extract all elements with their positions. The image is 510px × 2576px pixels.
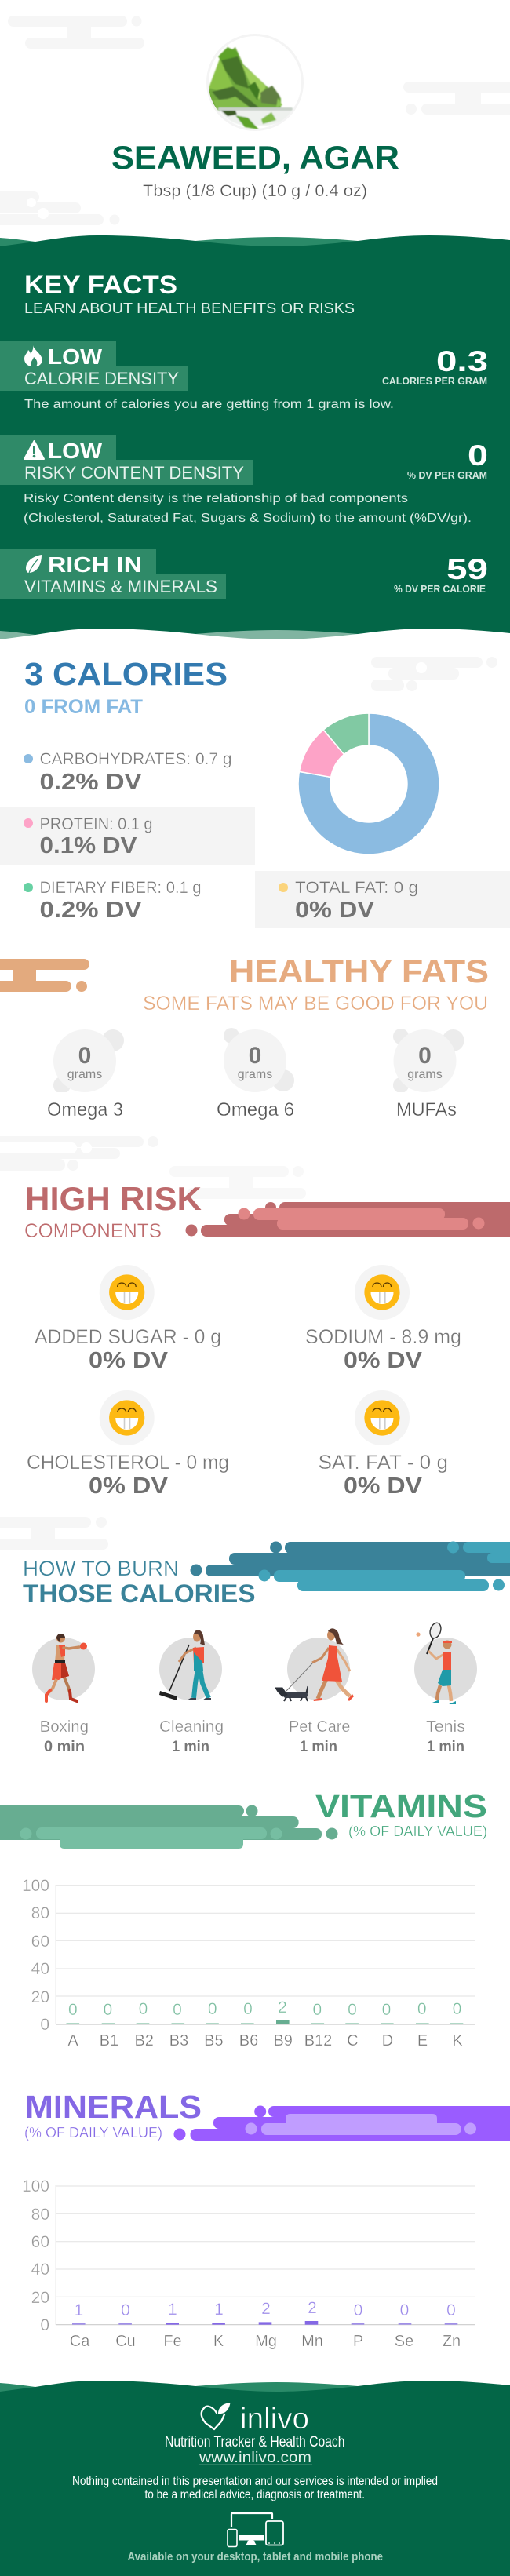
bar chart: vitamins: 40 [31,1960,49,1978]
icon: boxer [46,1634,87,1701]
risk: cholesterol: CHOLESTEROL - 0 mg [27,1452,229,1474]
decorative band: healthy fats [0,959,89,992]
heading: those calories: THOSE CALORIES [23,1579,256,1608]
fact: calorie density [0,341,488,391]
bar chart: minerals: 40 [31,2261,49,2279]
bar chart: minerals: P [353,2333,363,2350]
label: risky content density: RISKY CONTENT DENSITY [24,463,244,483]
panel: vitamins [0,1788,487,2050]
bar chart: vitamins [22,1877,475,2050]
heading: healthy fats: HEALTHY FATS [229,953,489,989]
legend: protein: 0.1% DV [39,833,137,858]
panel: total fat background [255,871,510,928]
legend: dietary fiber: DIETARY FIBER: 0.1 g [39,879,201,897]
bar chart: minerals: 1 [214,2301,224,2319]
bar chart: vitamins: B2 [134,2032,154,2050]
bar chart: vitamins: 0 [382,2001,391,2019]
activity: cleaning [159,1630,224,1755]
stat: mufas: grams [407,1068,443,1081]
icon: devices [228,2513,283,2547]
stat: omega 3: grams [67,1068,102,1081]
description: risky content density: Risky Content density is the relationship of bad components [24,492,408,505]
bar chart: vitamins: 0 [139,2000,148,2018]
tagline: Nutrition Tracker & Health Coach [165,2434,345,2450]
bar chart: minerals: 0 [40,2316,49,2334]
availability note: Available on your desktop, tablet and mobile phone [127,2550,383,2563]
stat: omega 6 [217,1028,294,1120]
description: risky content density [24,492,472,525]
bar chart: vitamins: B12 [304,2032,332,2050]
unit: calories per gram: CALORIES PER GRAM [382,375,487,387]
bar chart: vitamins: 0 [312,2001,322,2019]
activity: pet care: Pet Care [289,1718,350,1736]
value: calories per gram: 0.3 [436,345,488,377]
heading: key facts: KEY FACTS [24,271,177,299]
bar chart: vitamins: 0 [417,2000,427,2018]
activity: pet care: 1 min [300,1739,337,1755]
stat: omega 6: Omega 6 [217,1099,294,1120]
value: dv per calorie: 59 [446,553,488,585]
heading: minerals: MINERALS [25,2089,202,2125]
value: dv per gram: 0 [468,439,488,472]
legend: protein: PROTEIN: 0.1 g [39,815,152,833]
bar chart: vitamins: 0 [68,2001,78,2019]
risk: sodium [305,1265,461,1373]
bar chart: vitamins: 20 [31,1988,49,2006]
heading: calories: 3 CALORIES [24,656,228,692]
unit: dv per gram: % DV PER GRAM [407,469,487,481]
bar chart: minerals: 1 [75,2301,83,2319]
decorative band: minerals [174,2106,510,2141]
stat: mufas: 0 [418,1043,432,1069]
rating: low: LOW [48,439,103,463]
legend: total fat: 0% DV [295,898,375,923]
decorative band: high risk [185,1202,510,1237]
bar chart: minerals: Ca [70,2333,90,2350]
legend: dietary fiber [24,879,201,923]
activity: tennis: Tenis [426,1718,465,1736]
legend: dietary fiber: 0.2% DV [39,898,142,923]
bar chart: vitamins: K [452,2032,463,2050]
subheading: healthy fats: SOME FATS MAY BE GOOD FOR YOU [143,993,488,1015]
bar chart: vitamins: C [347,2032,359,2050]
icon: leaf [26,555,42,573]
rating: rich in: RICH IN [48,552,142,577]
stat: omega 3: Omega 3 [47,1099,123,1120]
icon: woman walking dog [275,1628,354,1701]
disclaimer: Nothing contained in this presentation and our services is intended or implied [72,2475,438,2488]
logo: inlivo [202,2403,309,2436]
bar chart: minerals: 0 [446,2301,456,2319]
disclaimer: to be a medical advice, diagnosis or treatment. [144,2488,365,2501]
bar chart: vitamins: B1 [100,2032,118,2050]
stat: mufas: MUFAs [396,1099,457,1120]
decorative cloud: top right [403,82,510,115]
legend: carbohydrates [24,750,232,795]
fact: risky content density [0,435,488,485]
panel: calories [0,656,510,928]
label: calorie density: CALORIE DENSITY [24,369,179,388]
bar chart: minerals: 1 [168,2301,177,2319]
bar chart: minerals: Se [395,2333,413,2350]
decorative cloud: above high risk right [169,1166,306,1199]
food photo: seaweed in a glass bowl [207,35,303,130]
bar chart: minerals: K [213,2333,224,2350]
stat: omega 6: 0 [249,1043,261,1069]
risk: saturated fat: SAT. FAT - 0 g [319,1452,448,1474]
bar chart: vitamins: B3 [169,2032,188,2050]
bar chart: minerals: Mn [301,2333,323,2350]
bar chart: vitamins: B9 [273,2032,293,2050]
bar chart: minerals: Mg [255,2333,277,2350]
disclaimer [72,2475,438,2501]
activity: tennis: 1 min [427,1739,464,1755]
bar chart: vitamins: 100 [22,1877,49,1895]
bar chart: vitamins: 0 [104,2001,112,2019]
risk: saturated fat: 0% DV [344,1474,423,1499]
icon: tennis player [416,1621,456,1704]
bar chart: vitamins: 0 [243,2000,253,2018]
subheading: from fat: 0 FROM FAT [24,696,143,718]
bar chart: vitamins: E [417,2032,428,2050]
subheading: percent of daily value: (% OF DAILY VALUE) [24,2125,162,2141]
bar chart: vitamins: D [382,2032,393,2050]
bar chart: vitamins: 80 [31,1904,49,1922]
activity: boxing: 0 min [44,1739,85,1755]
unit: dv per calorie: % DV PER CALORIE [394,583,486,595]
description: calorie density: The amount of calories you are getting from 1 gram is low. [24,398,394,411]
bar chart: minerals: 2 [308,2299,317,2317]
stat: omega 3: 0 [78,1043,91,1069]
bar chart: vitamins: 0 [173,2001,182,2019]
activity: cleaning: 1 min [172,1739,209,1755]
subheading: components: COMPONENTS [24,1220,162,1242]
risk: added sugar: 0% DV [89,1348,169,1373]
panel: how to burn those calories [23,1541,510,1755]
activity: tennis [414,1621,477,1755]
description: risky content density: (Cholesterol, Saturated Fat, Sugars & Sodium) to the amount (%DV/gr). [24,512,472,525]
panel: healthy fats [0,953,489,1120]
stat: omega 6: grams [238,1068,272,1081]
fact: rich in vitamins and minerals [0,549,488,599]
subheading: key facts: LEARN ABOUT HEALTH BENEFITS OR RISKS [24,301,355,316]
bar chart: vitamins: A [67,2032,78,2050]
bar chart: minerals: Cu [115,2333,136,2350]
donut chart [298,713,439,854]
website: www.inlivo.com [199,2450,311,2466]
risk: saturated fat [319,1390,448,1499]
legend: protein [24,815,152,858]
risk: sodium: 0% DV [344,1348,423,1373]
subheading: percent of daily value: (% OF DAILY VALUE) [348,1824,487,1839]
decorative band: vitamins [0,1805,337,1849]
icon: warning triangle [24,441,44,459]
risk: sodium: SODIUM - 8.9 mg [305,1326,461,1348]
heading: how to burn: HOW TO BURN [23,1557,179,1580]
activity: pet care [275,1628,354,1755]
risk: added sugar [35,1265,221,1373]
bar chart: minerals: 80 [31,2206,49,2224]
bar chart: minerals: 0 [400,2301,409,2319]
decorative cloud: calories [371,657,497,691]
activity: cleaning: Cleaning [159,1718,224,1736]
bar chart: minerals: 0 [121,2301,130,2319]
bar chart: minerals [22,2177,475,2350]
bar chart: vitamins: 0 [453,2000,461,2018]
decorative band: burn [190,1541,510,1591]
bar chart: vitamins: B6 [239,2032,258,2050]
bar chart: minerals: 60 [31,2233,49,2251]
bar chart: vitamins: 0 [40,2016,49,2034]
panel: high risk [24,1180,510,1499]
footer [0,2381,510,2576]
heading: vitamins: VITAMINS [315,1788,487,1824]
risk: added sugar: ADDED SUGAR - 0 g [35,1326,221,1348]
risk: cholesterol [27,1390,229,1499]
decorative cloud: lower left [0,191,119,225]
legend: total fat: TOTAL FAT: 0 g [295,879,418,897]
icon: person sweeping [159,1630,211,1700]
legend: carbohydrates: CARBOHYDRATES: 0.7 g [39,750,232,768]
risk: cholesterol: 0% DV [89,1474,169,1499]
bar chart: vitamins: 60 [31,1933,49,1951]
label: vitamins and minerals: VITAMINS & MINERALS [24,577,217,596]
bar chart: vitamins: 0 [348,2001,357,2019]
stat: omega 3 [47,1029,124,1120]
title: SEAWEED, AGAR [111,139,399,176]
bar chart: minerals: 100 [22,2177,49,2195]
bar chart: minerals: Zn [443,2333,461,2350]
bar chart: vitamins: 0 [208,2000,217,2018]
activity: boxing: Boxing [40,1718,89,1736]
bar chart: minerals: 20 [31,2289,49,2307]
bar chart: vitamins: 2 [278,1998,287,2017]
panel: protein background [0,807,255,865]
bar chart: minerals: Fe [163,2333,182,2350]
stat: mufas [393,1029,464,1120]
serving size: Tbsp (1/8 Cup) (10 g / 0.4 oz) [143,182,367,200]
activity: boxing [32,1634,95,1755]
decorative cloud: above high risk left [0,1136,158,1171]
bar chart: vitamins: B5 [204,2032,224,2050]
logo: inlivo: inlivo [240,2403,309,2436]
legend: carbohydrates: 0.2% DV [39,770,142,795]
panel: minerals [22,2089,510,2350]
decorative cloud: above burn section [0,1517,108,1550]
decorative cloud: top left [8,16,144,49]
panel: key facts [0,235,510,651]
bar chart: minerals: 0 [354,2301,362,2319]
heading: high risk: HIGH RISK [25,1180,202,1217]
legend: total fat [279,879,418,923]
icon: flame [24,345,42,366]
bar chart: minerals: 2 [261,2300,271,2318]
rating: low: LOW [48,344,103,369]
